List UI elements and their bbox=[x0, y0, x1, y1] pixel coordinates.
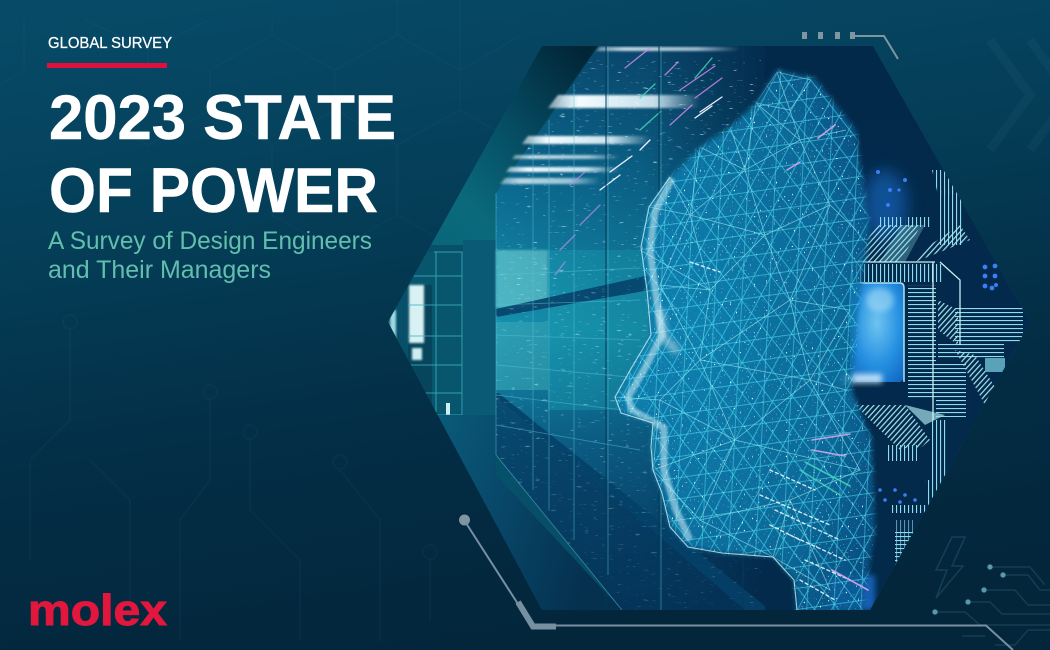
background chevrons, top right bbox=[990, 40, 1050, 150]
molex logo: molex bbox=[28, 586, 168, 635]
subtitle bbox=[48, 227, 372, 284]
server aisle bands bbox=[496, 275, 770, 610]
circuit connector, top right bbox=[802, 32, 898, 59]
subtitle: A Survey of Design Engineers bbox=[48, 227, 372, 255]
wall shade bbox=[570, 46, 765, 606]
glowing face outline bbox=[615, 177, 797, 610]
white light streaks bbox=[500, 47, 740, 184]
title: OF POWER bbox=[49, 156, 378, 226]
coloured light streaks bbox=[555, 48, 722, 275]
room base bbox=[443, 46, 1030, 610]
subtitle: and Their Managers bbox=[48, 256, 271, 284]
lightning bolt icon bbox=[936, 537, 965, 598]
parallel trace groups bbox=[854, 225, 921, 262]
chip on circuit board bbox=[842, 283, 904, 383]
lit window bbox=[390, 252, 462, 416]
hexagon photo panel bbox=[380, 40, 1040, 620]
back wall with window bbox=[380, 240, 496, 475]
blue LED dots bbox=[876, 170, 998, 504]
head silhouette mesh bbox=[600, 60, 880, 620]
background hexagon grid bbox=[0, 0, 522, 250]
title bbox=[49, 83, 396, 226]
lit lower panels bbox=[496, 250, 548, 308]
mesh network lines bbox=[615, 72, 860, 590]
eyebrow label: GLOBAL SURVEY bbox=[48, 35, 172, 52]
server speckle lights bbox=[496, 60, 761, 610]
floor bbox=[430, 415, 622, 610]
pink data streaks on head bbox=[787, 125, 868, 590]
server wall bbox=[496, 56, 726, 610]
title: 2023 STATE bbox=[49, 83, 396, 153]
background circuit traces, left bbox=[30, 315, 437, 640]
bright face band bbox=[628, 178, 690, 540]
lower blue chip glow bbox=[830, 575, 875, 610]
column frames and grid bbox=[606, 46, 743, 610]
circuit board bbox=[765, 46, 1030, 610]
background circuit traces, bottom right bbox=[932, 564, 1050, 645]
bright dashes on neck bbox=[690, 262, 850, 600]
red accent bar bbox=[47, 63, 167, 68]
circuit connector, bottom bbox=[459, 514, 1013, 650]
blue glow bbox=[863, 170, 907, 240]
ceiling strip bbox=[430, 46, 598, 246]
